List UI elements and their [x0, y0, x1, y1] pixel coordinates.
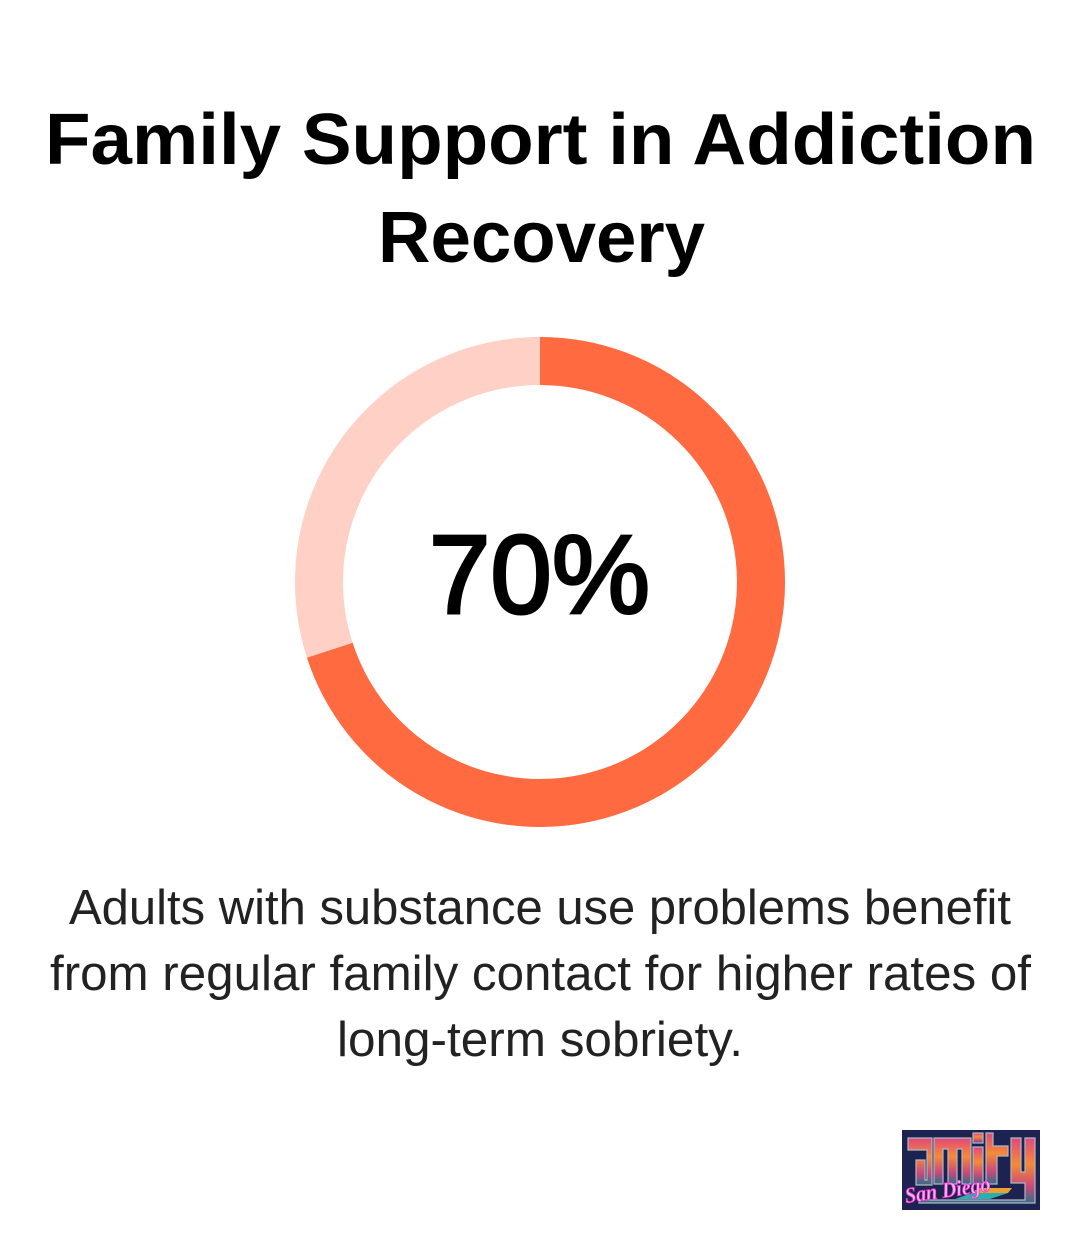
logo: Amity San Diego: [902, 1130, 1040, 1210]
description text: from regular family contact for higher rates of: [50, 947, 1031, 1001]
logo script: San Diego: [903, 1171, 992, 1208]
description text: long-term sobriety.: [337, 1013, 743, 1067]
title: Family Support in Addiction: [45, 100, 1036, 180]
description text: [50, 881, 1031, 1067]
donut chart: 70%: [319, 361, 761, 803]
donut value: 70%: [429, 513, 650, 637]
title: Recovery: [378, 198, 705, 278]
title: [45, 100, 1036, 278]
logo letters: [908, 1133, 1035, 1203]
description text: Adults with substance use problems benefit: [69, 881, 1011, 935]
logo beach stripe: [955, 1193, 1008, 1199]
